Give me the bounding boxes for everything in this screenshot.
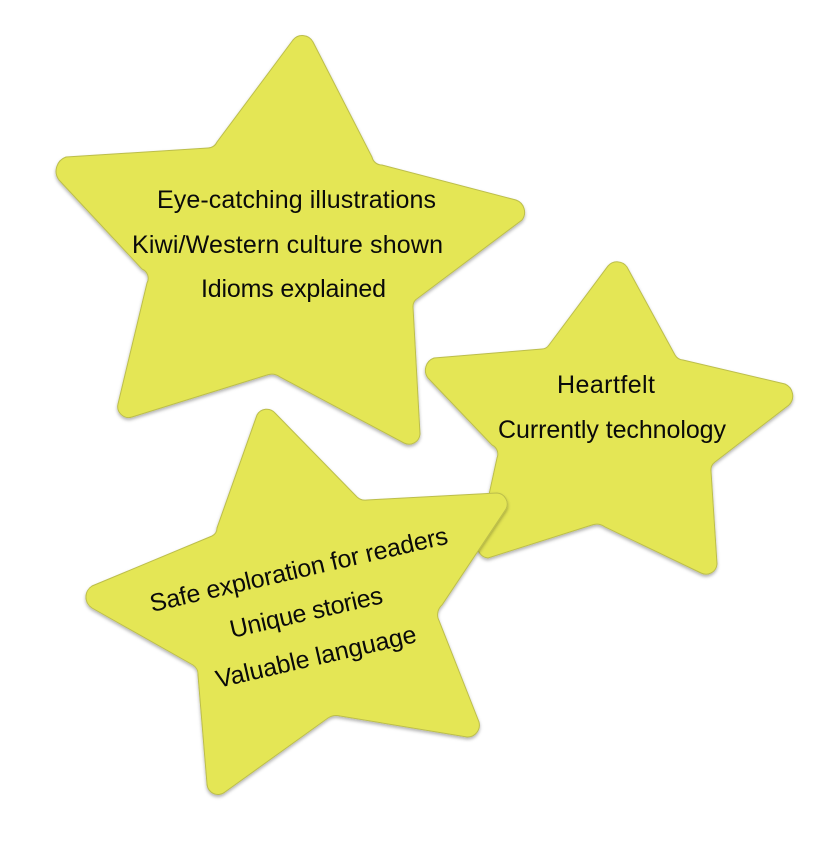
star text: top left: Kiwi/Western culture shown <box>132 231 443 259</box>
star text: right: Heartfelt <box>557 371 655 399</box>
star text: right <box>498 371 726 444</box>
star text: right: Currently technology <box>498 416 726 444</box>
star text: top left <box>132 186 443 303</box>
star text: bottom left: Safe exploration for readers <box>147 522 451 618</box>
star text: bottom left <box>147 522 451 694</box>
star text: bottom left: Unique stories <box>227 581 385 644</box>
star: bottom left <box>86 409 507 795</box>
star text: bottom left: Valuable language <box>213 620 419 694</box>
star: right <box>425 262 793 574</box>
star text: top left: Eye-catching illustrations <box>157 186 436 214</box>
star text: top left: Idioms explained <box>201 275 386 303</box>
star: top left <box>56 36 525 444</box>
